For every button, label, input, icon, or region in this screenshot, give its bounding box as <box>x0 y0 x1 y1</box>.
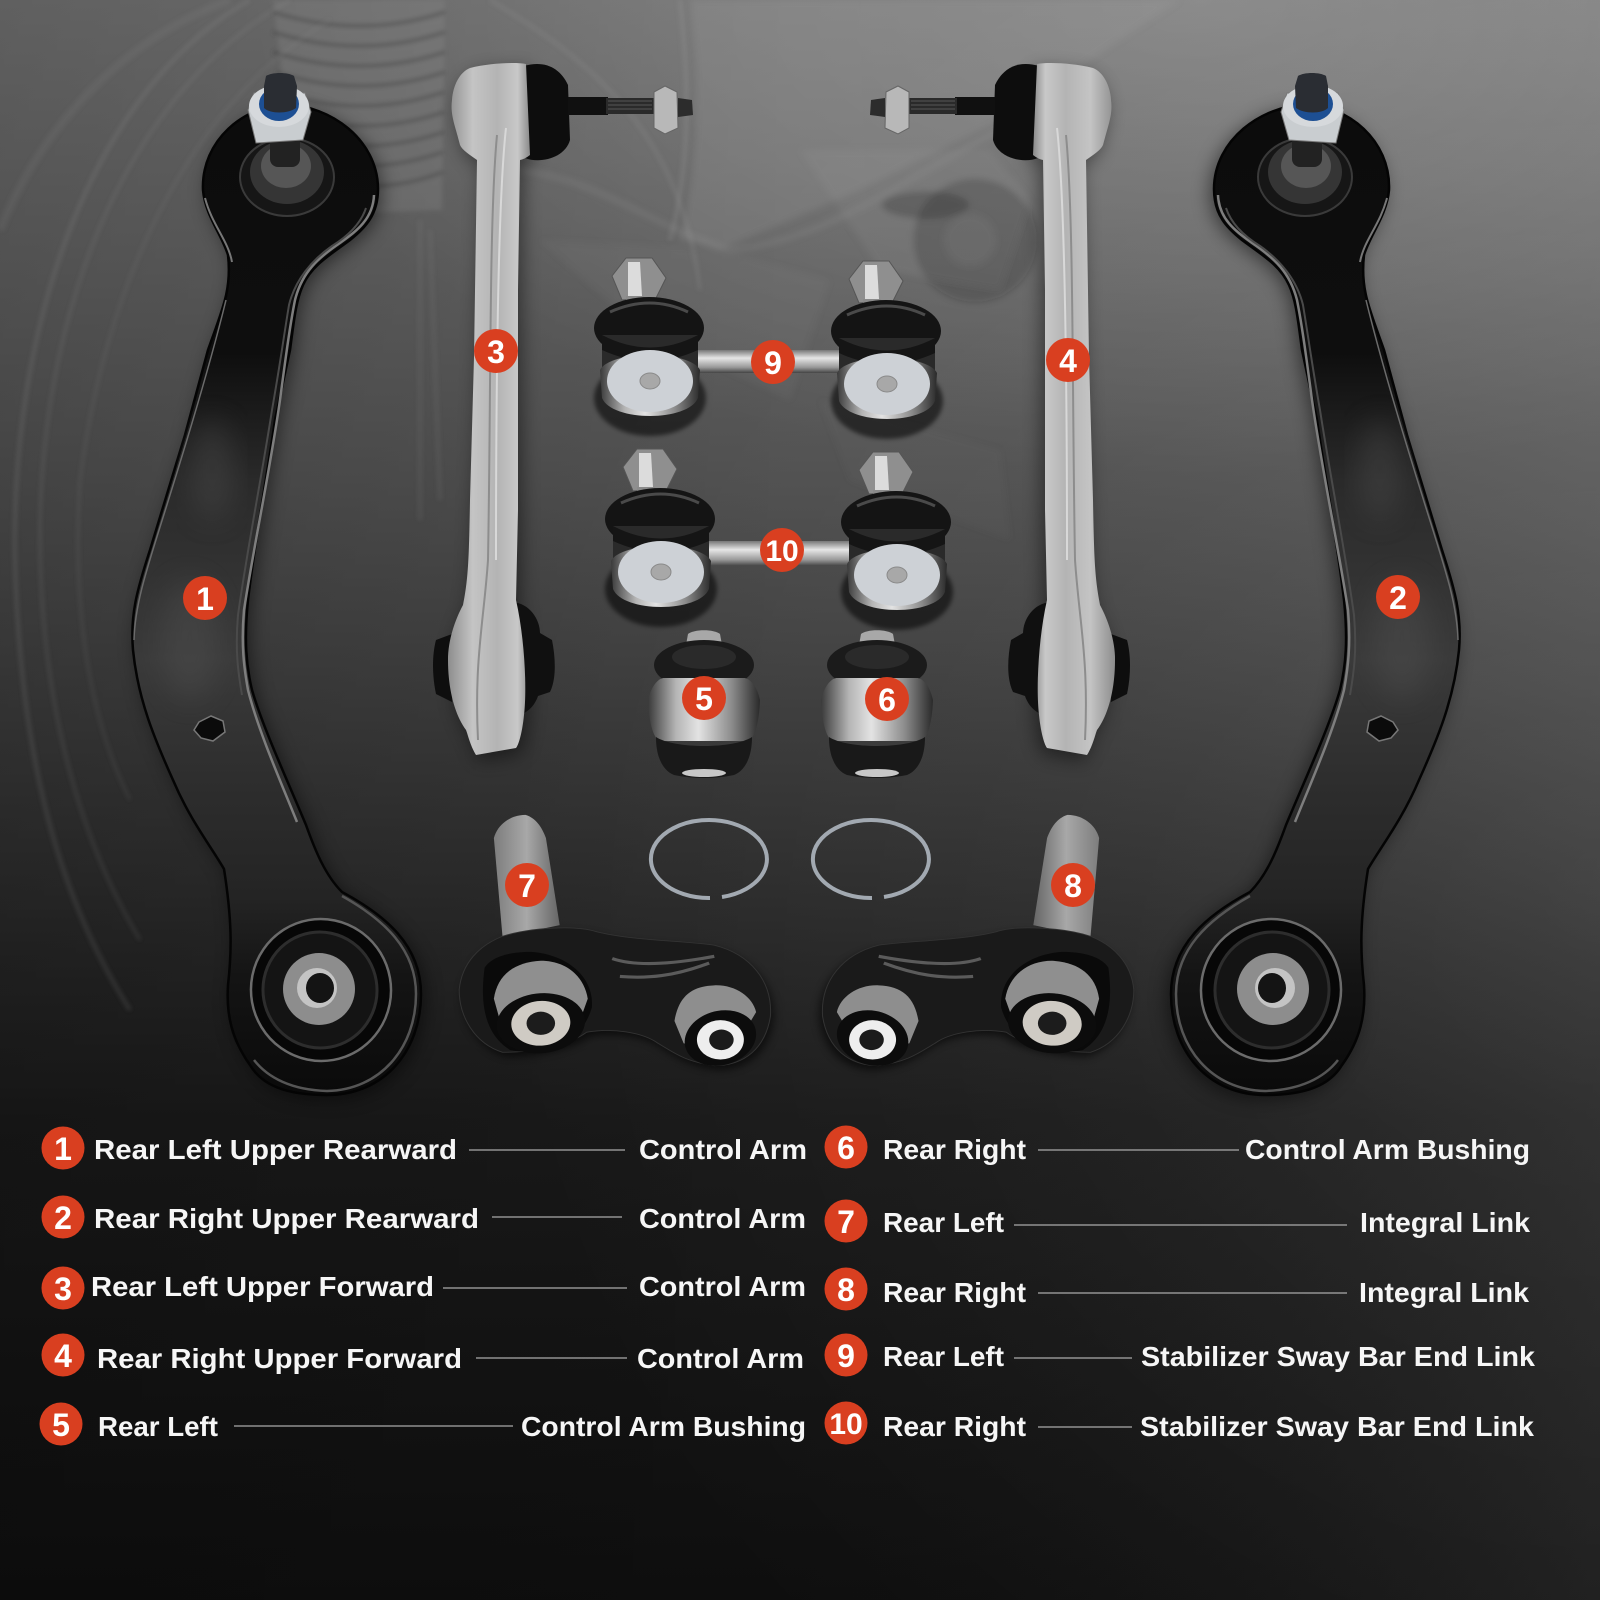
stabilizer link 9 <box>594 258 943 439</box>
legend row 1: Rear Left Upper Rearward <box>94 1134 457 1165</box>
marker 8: 8 <box>1064 868 1082 904</box>
rear left upper forward control arm (3) <box>433 63 693 761</box>
marker 8 <box>1051 863 1095 907</box>
legend row 7: Integral Link <box>1360 1207 1530 1238</box>
legend row 8 <box>824 1268 1529 1310</box>
rear right upper rearward control arm (2) <box>1167 73 1460 1099</box>
marker 2: 2 <box>1389 580 1407 616</box>
legend row 1: 1 <box>54 1131 72 1167</box>
legend row 4 <box>42 1334 804 1376</box>
parts legend <box>40 1126 1535 1446</box>
marker 7 <box>505 863 549 907</box>
legend row 5 <box>40 1402 806 1446</box>
marker 10 <box>760 528 804 572</box>
marker 1: 1 <box>196 581 214 617</box>
legend row 6: Rear Right <box>883 1134 1026 1165</box>
control arm bushing 5 <box>648 630 760 778</box>
legend row 7: Rear Left <box>883 1207 1004 1238</box>
integral link 8 <box>819 815 1134 1076</box>
marker 4: 4 <box>1059 343 1077 379</box>
legend row 10: Stabilizer Sway Bar End Link <box>1140 1411 1534 1442</box>
marker 9: 9 <box>764 345 782 381</box>
legend row 5: 5 <box>52 1407 70 1443</box>
legend row 1 <box>42 1126 807 1170</box>
legend row 3: Control Arm <box>639 1271 806 1302</box>
legend row 7 <box>824 1200 1530 1242</box>
ghost spring boot <box>273 0 445 215</box>
legend row 9 <box>824 1334 1535 1376</box>
legend row 9: Rear Left <box>883 1341 1004 1372</box>
ghost wheel arcs <box>0 0 700 1010</box>
legend row 6: 6 <box>837 1130 855 1166</box>
legend row 6 <box>824 1126 1530 1168</box>
legend row 4: Rear Right Upper Forward <box>97 1343 462 1374</box>
legend row 3: Rear Left Upper Forward <box>91 1271 434 1302</box>
legend row 8: 8 <box>837 1272 855 1308</box>
control arm bushing 6 <box>821 630 933 778</box>
marker 10: 10 <box>765 535 799 568</box>
legend row 9: Stabilizer Sway Bar End Link <box>1141 1341 1535 1372</box>
legend row 3: 3 <box>54 1271 72 1307</box>
legend row 2: 2 <box>54 1200 72 1236</box>
legend row 1: Control Arm <box>639 1134 807 1165</box>
legend row 10 <box>824 1402 1534 1444</box>
marker 3 <box>474 329 518 373</box>
legend row 2: Rear Right Upper Rearward <box>94 1203 479 1234</box>
legend row 9: 9 <box>837 1338 855 1374</box>
legend row 8: Integral Link <box>1359 1277 1529 1308</box>
legend row 10: 10 <box>829 1408 863 1441</box>
marker 5 <box>682 676 726 720</box>
legend row 6: Control Arm Bushing <box>1245 1134 1530 1165</box>
rear right upper forward control arm (4) <box>870 63 1130 761</box>
marker 6: 6 <box>878 682 896 718</box>
legend row 7: 7 <box>837 1204 855 1240</box>
legend row 5: Rear Left <box>98 1411 218 1442</box>
marker 7: 7 <box>518 868 536 904</box>
snap ring right <box>813 820 929 898</box>
legend row 10: Rear Right <box>883 1411 1026 1442</box>
marker 1 <box>183 576 227 620</box>
marker 3: 3 <box>487 334 505 370</box>
marker 5: 5 <box>695 681 713 717</box>
legend row 5: Control Arm Bushing <box>521 1411 806 1442</box>
snap ring left <box>651 820 767 898</box>
marker 2 <box>1376 575 1420 619</box>
marker 9 <box>751 340 795 384</box>
legend row 8: Rear Right <box>883 1277 1026 1308</box>
legend row 2 <box>42 1196 806 1238</box>
ghost right machinery <box>520 0 1180 540</box>
integral link 7 <box>459 815 774 1076</box>
legend row 3 <box>42 1266 806 1310</box>
legend row 2: Control Arm <box>639 1203 806 1234</box>
legend row 4: Control Arm <box>637 1343 804 1374</box>
marker 6 <box>865 677 909 721</box>
legend row 4: 4 <box>54 1338 72 1374</box>
marker 4 <box>1046 338 1090 382</box>
rear left upper rearward control arm (1) <box>132 73 425 1099</box>
stabilizer link 10 <box>605 449 953 630</box>
